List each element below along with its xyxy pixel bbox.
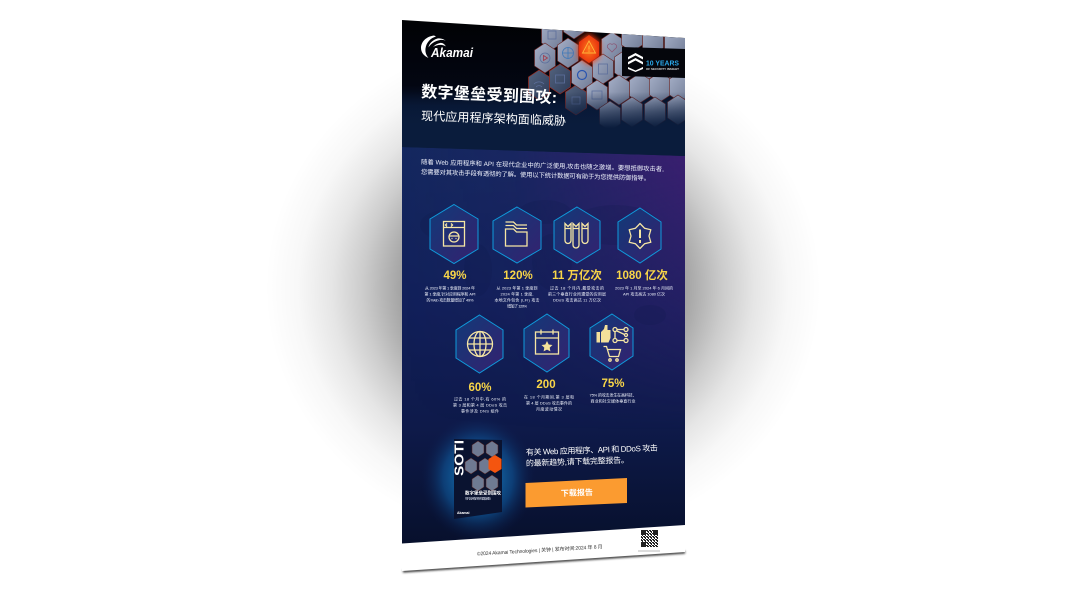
caption: 过去 18 个月内,最受攻击的 — [550, 284, 604, 290]
stat: 75% — [590, 314, 636, 404]
intro line 1: 随着 Web 应用程序和 API 在现代企业中的广泛使用,攻击也随之激增。要想抵御攻击者, — [421, 157, 664, 173]
footer text: ©2024 Akamai Technologies | 关钟 | 发布时间:2024 年 8 月 — [477, 543, 603, 557]
logo swoosh — [421, 36, 446, 58]
value: 1080 亿次 — [616, 268, 668, 282]
hexagon — [590, 314, 633, 370]
QR finder marks — [641, 530, 658, 547]
infographic poster scene — [300, 20, 786, 574]
glowing alert hexagon — [578, 33, 600, 65]
caption — [524, 394, 574, 412]
header hexagon wall — [407, 29, 685, 156]
stat: 200 — [524, 314, 574, 412]
icon: thumbs up — [596, 325, 610, 342]
QR code — [638, 530, 660, 552]
cover glow — [420, 414, 536, 542]
caption: 商业和社交媒体垂直行业 — [590, 398, 636, 404]
purple glow — [532, 152, 685, 371]
bottom edge shadow — [403, 551, 685, 572]
hexagon — [524, 314, 569, 372]
stat: 108 billion — [615, 208, 673, 296]
cta line 1: 有关 Web 应用程序、API 和 DDoS 攻击 — [526, 443, 658, 457]
header bottom fade — [531, 94, 685, 128]
intro line 2: 您需要对其攻击手段有透彻的了解。使用以下统计数据可有助于为您提供防御指导。 — [421, 167, 650, 182]
icon: browser bug — [444, 222, 464, 246]
badge subtitle: OF SECURITY INSIGHT — [646, 67, 679, 71]
caption: 2024 年第 1 季度, — [500, 290, 534, 296]
caption — [424, 284, 476, 302]
light hexagon cells — [534, 29, 685, 126]
icon: calendar star — [536, 330, 558, 354]
cover logo: Akamai — [457, 511, 469, 515]
cover SOTI: SOTI — [452, 440, 466, 476]
badge title: 10 YEARS — [646, 58, 679, 68]
caption: 的 Web 攻击数量增加了 49% — [426, 296, 474, 302]
subtitle: 现代应用程序架构面临威胁 — [421, 108, 566, 128]
caption — [494, 284, 540, 308]
cover subtitle: 现代应用程序架构面临威胁 — [465, 496, 491, 500]
poster body background — [402, 140, 685, 550]
hexagon — [456, 315, 503, 373]
caption — [615, 284, 673, 296]
header background — [402, 15, 685, 156]
10 years badge — [622, 47, 685, 78]
caption: 从 2023 年第 1 季度到 — [496, 284, 538, 290]
cta line 2: 的最新趋势,请下载完整报告。 — [526, 455, 629, 468]
caption: 在 18 个月期间,第 3 层和 — [524, 394, 574, 400]
value: 11 万亿次 — [552, 268, 602, 282]
stat: 120% — [493, 207, 541, 308]
cover title: 数字堡垒受到围攻 — [465, 490, 502, 496]
icon: folder — [506, 222, 527, 246]
caption: 从 2023 年第 1 季度到 2024 年 — [425, 284, 475, 290]
poster — [402, 9, 690, 550]
caption: 第 1 季度,针对应用程序和 API — [424, 290, 476, 296]
caption — [453, 396, 507, 414]
caption: 过去 18 个月中,有 60% 的 — [454, 396, 506, 402]
logo wordmark: Akamai — [430, 46, 473, 60]
caption: 事件涉及 DNS 组件 — [461, 408, 499, 414]
value: 60% — [468, 382, 492, 394]
hexagon — [554, 207, 600, 263]
stat: 49% — [424, 204, 478, 302]
icon: alert gear — [629, 224, 651, 248]
caption: API 攻击高达 1080 亿次 — [623, 290, 665, 296]
cover alert hexagon — [488, 455, 502, 473]
caption: 月度波动情况 — [536, 406, 562, 412]
hexagon — [618, 208, 661, 263]
value: 75% — [601, 378, 625, 390]
dark hexagon cells — [528, 64, 586, 115]
caption: 第 3 层和第 4 层 DDoS 攻击 — [453, 402, 507, 408]
caption: 75% 的攻击发生在高科技、 — [590, 392, 636, 398]
value: 200 — [536, 379, 556, 391]
button shape — [526, 478, 627, 508]
hexagon cell icons — [534, 31, 617, 104]
stat: 11 trillion — [548, 207, 606, 302]
icon: network nodes — [613, 328, 628, 342]
chevron icon — [628, 53, 643, 72]
value: 49% — [443, 270, 467, 282]
caption — [548, 284, 606, 302]
stat: 60% — [453, 315, 507, 414]
caption — [590, 392, 636, 404]
value: 120% — [503, 270, 533, 282]
caption: 第 4 层 DDoS 攻击事件的 — [526, 400, 572, 406]
caption: 本地文件包含 (LFI) 攻击 — [494, 296, 540, 302]
icon: shopping cart — [604, 346, 620, 361]
QR caption — [638, 550, 660, 552]
intro paragraph — [421, 157, 664, 182]
button label: 下载报告 — [561, 487, 593, 498]
caption: 增加了 120% — [507, 302, 527, 308]
header lower band — [402, 128, 685, 158]
background drop shadow — [240, 0, 850, 608]
icon: globe — [468, 332, 492, 356]
cover hexagons — [465, 441, 498, 491]
footer band — [402, 525, 685, 571]
caption: 前三个垂直行业所遭受的应用层 — [548, 290, 606, 296]
download button — [526, 478, 627, 508]
icon: three bombs — [565, 224, 588, 248]
cover — [454, 439, 502, 519]
caption: DDoS 攻击高达 11 万亿次 — [553, 296, 601, 302]
caption: 2023 年 1 月至 2024 年 6 月间的 — [615, 284, 673, 290]
title: 数字堡垒受到围攻: — [421, 82, 558, 107]
hexagon — [493, 207, 541, 263]
report cover — [420, 414, 536, 542]
QR modules — [641, 530, 658, 547]
hexagon — [430, 204, 478, 264]
call to action text — [526, 443, 658, 468]
Akamai logo — [421, 36, 473, 60]
world map texture — [420, 200, 666, 325]
